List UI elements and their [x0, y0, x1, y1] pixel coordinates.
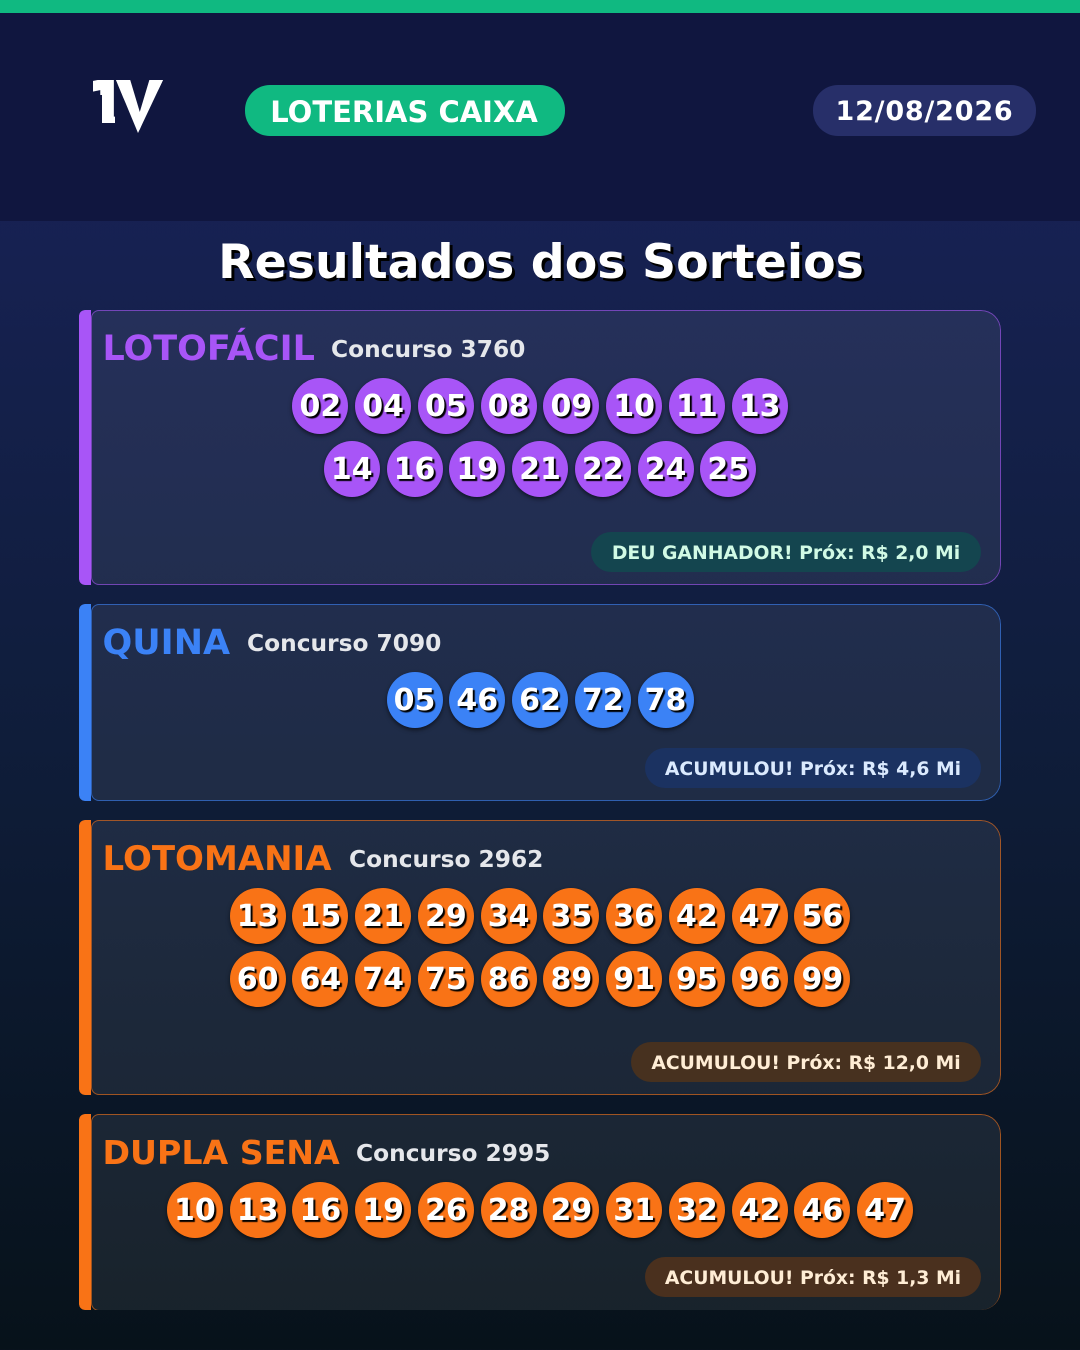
game name: QUINA [102, 623, 230, 663]
numbers row 2: 21 [519, 452, 561, 487]
logo [93, 80, 163, 133]
numbers row 1: 04 [362, 389, 404, 424]
numbers row 2: 16 [394, 452, 435, 487]
numbers row 2: 24 [645, 452, 686, 487]
brand label: LOTERIAS CAIXA [270, 95, 538, 129]
numbers row: 46 [456, 683, 498, 718]
panel: Dupla Sena [79, 1114, 1001, 1310]
numbers row 1 [290, 378, 790, 438]
numbers row 2: 22 [582, 452, 624, 487]
panel: Lotomania [79, 820, 1001, 1095]
numbers row 1: 36 [613, 899, 655, 934]
numbers row: 72 [582, 683, 624, 718]
numbers row: 62 [519, 683, 561, 718]
header band [0, 0, 1080, 221]
numbers row: 05 [394, 683, 435, 718]
numbers row 1: 29 [425, 899, 467, 934]
date badge [813, 85, 1036, 136]
top accent bar [0, 0, 1080, 13]
numbers row: 13 [237, 1193, 278, 1228]
numbers row [386, 672, 696, 732]
brand badge [245, 85, 565, 136]
prize status: DEU GANHADOR! Próx: R$ 2,0 Mi [612, 543, 960, 564]
contest number: Concurso 2962 [349, 846, 543, 873]
numbers row 1: 21 [362, 899, 404, 934]
numbers row [166, 1182, 914, 1241]
game name: LOTOFÁCIL [102, 329, 315, 369]
numbers row: 78 [645, 683, 686, 718]
numbers row 1: 15 [300, 899, 341, 934]
numbers row 1: 35 [550, 899, 592, 934]
numbers row 1: 56 [802, 899, 843, 934]
numbers row: 46 [802, 1193, 843, 1228]
numbers row 2: 89 [550, 962, 592, 997]
numbers row 1: 47 [739, 899, 780, 934]
numbers row: 28 [488, 1193, 530, 1228]
contest number: Concurso 3760 [331, 336, 525, 363]
numbers row 2: 95 [676, 962, 718, 997]
numbers row 1: 42 [676, 899, 718, 934]
numbers row 2: 96 [739, 962, 780, 997]
numbers row 1: 08 [488, 389, 530, 424]
prize status [645, 1257, 981, 1297]
game name: LOTOMANIA [102, 839, 332, 879]
panel: Quina [79, 604, 1001, 801]
numbers row 2: 60 [237, 962, 278, 997]
numbers row: 29 [550, 1193, 592, 1228]
numbers row 1: 05 [425, 389, 467, 424]
numbers row 1: 34 [488, 899, 530, 934]
numbers row: 42 [739, 1193, 780, 1228]
numbers row: 31 [613, 1193, 655, 1228]
numbers row 2: 74 [362, 962, 404, 997]
numbers row: 32 [676, 1193, 718, 1228]
prize status [591, 532, 981, 572]
prize status: ACUMULOU! Próx: R$ 1,3 Mi [665, 1268, 961, 1289]
numbers row 1: 02 [300, 389, 341, 424]
date badge: 12/08/2026 [835, 96, 1014, 127]
numbers row 2: 86 [488, 962, 530, 997]
numbers row 2: 25 [707, 452, 749, 487]
numbers row 1 [228, 888, 852, 948]
game name: DUPLA SENA [102, 1133, 340, 1172]
numbers row: 47 [864, 1193, 906, 1228]
prize status [645, 748, 981, 788]
numbers row 1: 09 [550, 389, 592, 424]
prize status: ACUMULOU! Próx: R$ 4,6 Mi [665, 759, 961, 780]
prize status [631, 1042, 981, 1082]
main title: Resultados dos Sorteios [218, 235, 864, 290]
numbers row 1: 10 [613, 389, 655, 424]
numbers row: 10 [174, 1193, 216, 1228]
contest number: Concurso 2995 [356, 1140, 550, 1167]
numbers row: 19 [362, 1193, 404, 1228]
numbers row 2: 64 [300, 962, 341, 997]
numbers row 1: 13 [739, 389, 780, 424]
numbers row 1: 13 [237, 899, 278, 934]
contest number: Concurso 7090 [247, 630, 441, 657]
numbers row 2: 99 [802, 962, 843, 997]
prize status: ACUMULOU! Próx: R$ 12,0 Mi [651, 1053, 961, 1074]
numbers row 2 [228, 951, 852, 1010]
numbers row 2: 14 [331, 452, 373, 487]
panel: Lotofácil [79, 310, 1001, 585]
numbers row: 26 [425, 1193, 467, 1228]
numbers row: 16 [300, 1193, 341, 1228]
numbers row 2: 91 [613, 962, 655, 997]
numbers row 2: 19 [456, 452, 498, 487]
numbers row 2 [322, 441, 758, 501]
numbers row 1: 11 [676, 389, 718, 424]
numbers row 2: 75 [425, 962, 467, 997]
